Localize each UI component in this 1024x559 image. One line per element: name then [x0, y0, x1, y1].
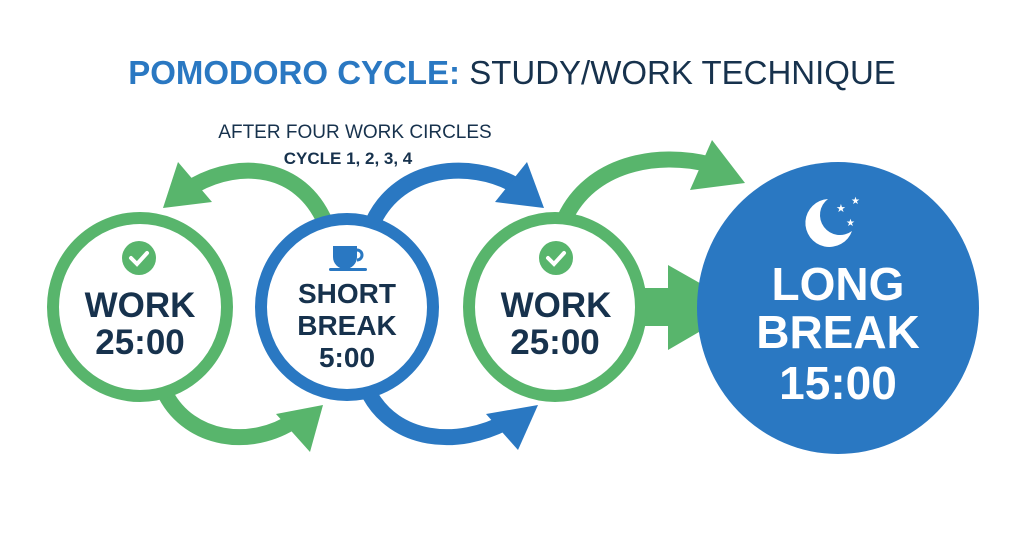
circle: long break [697, 162, 979, 454]
subtitle: after four work circles [218, 122, 492, 168]
circle: work 1: 25:00 [95, 323, 185, 362]
circle: short break: 5:00 [319, 342, 375, 373]
circle: short break: SHORT [298, 278, 396, 309]
icon: moon and stars: ★ [836, 203, 846, 215]
circle: long break: BREAK [756, 306, 920, 358]
circle: long break: LONG [772, 258, 904, 310]
circle: short break: BREAK [297, 310, 397, 341]
circle: work 2: 25:00 [510, 323, 600, 362]
title: POMODORO CYCLE: STUDY/WORK TECHNIQUE [128, 54, 896, 91]
icon: cup [329, 246, 367, 271]
arrow: green bottom left [166, 395, 323, 452]
icon: moon and stars [805, 196, 860, 247]
circle: work 2 [469, 218, 641, 396]
icon: check [122, 241, 156, 275]
icon: check [539, 241, 573, 275]
circle: short break [261, 219, 433, 395]
arrow: blue bottom middle [370, 395, 538, 450]
arrow: green top left [163, 162, 325, 222]
arrow: green straight [640, 265, 742, 350]
circle: work 1: WORK [85, 286, 195, 325]
subtitle: after four work circles: CYCLE 1, 2, 3, 4 [284, 149, 413, 168]
arrow: green top right [565, 140, 745, 218]
circle: work 1 [53, 218, 227, 396]
circle: long break: 15:00 [779, 357, 897, 409]
arrow: blue top middle [373, 162, 544, 222]
subtitle: after four work circles: AFTER FOUR WORK CIRCLES [218, 122, 492, 143]
icon: moon and stars: ★ [851, 196, 860, 207]
circle: work 2: WORK [501, 286, 611, 325]
icon: moon and stars: ★ [846, 218, 855, 229]
